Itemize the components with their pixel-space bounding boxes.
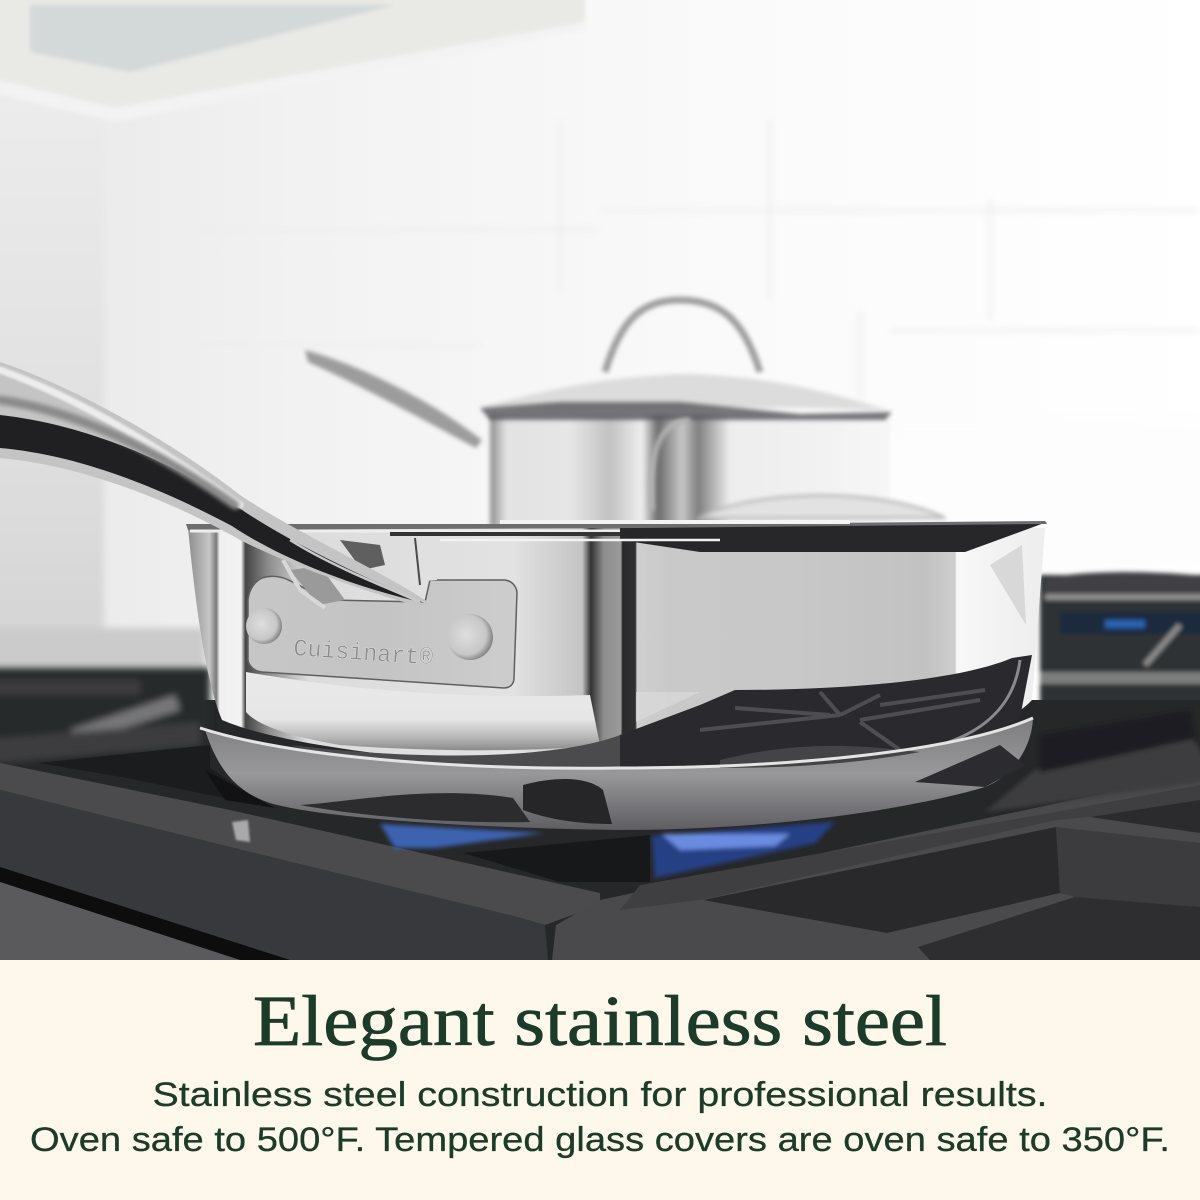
recess one bbox=[703, 827, 1060, 933]
recess near pan bbox=[38, 745, 268, 807]
left rivet bbox=[246, 608, 282, 644]
caption panel bbox=[0, 960, 1200, 1200]
ring top highlight bbox=[200, 718, 1033, 768]
dark strip below body bbox=[290, 735, 620, 768]
glossy highlight on bar bbox=[232, 820, 250, 842]
right rivet bbox=[447, 614, 493, 660]
blurred left grates bbox=[0, 668, 210, 765]
pan rim bbox=[186, 521, 1047, 530]
front-right grate bbox=[552, 773, 1200, 960]
body text line 1: Stainless steel construction for professional results. bbox=[152, 1076, 1048, 1114]
front-left grate bar top face bbox=[0, 763, 600, 925]
logo engraved: Cuisinart® bbox=[292, 636, 435, 673]
photo: cast iron stove grates bbox=[0, 668, 1200, 960]
pan base ring bbox=[205, 718, 1033, 830]
handle bracket bbox=[340, 540, 385, 570]
grate reflection bbox=[620, 655, 1032, 767]
dark rim band right bbox=[620, 522, 1047, 552]
ring reflections bbox=[523, 779, 612, 824]
body text line 2: Oven safe to 500°F. Tempered glass covers are oven safe to 350°F. bbox=[30, 1121, 1170, 1159]
lid rim bbox=[480, 402, 892, 420]
pot body bbox=[490, 415, 890, 527]
photo: kitchen background wall bbox=[0, 0, 1200, 960]
photo: background saucepan with lid bbox=[305, 300, 945, 527]
lid knob handle bbox=[605, 300, 760, 372]
lower bright band bbox=[246, 672, 600, 750]
photo: saute pan bbox=[0, 362, 1047, 830]
black gap and stove body bbox=[0, 867, 290, 960]
recess right wall bbox=[1056, 827, 1200, 907]
glass lid bbox=[480, 374, 888, 410]
top ridge shade bbox=[620, 785, 1200, 910]
pan body bbox=[188, 528, 1045, 768]
photo: range hood shelf bbox=[0, 0, 585, 122]
rear lid loop reflection bbox=[651, 420, 690, 510]
photo: right burner and pot bbox=[1040, 572, 1200, 750]
pot long handle bbox=[305, 350, 482, 448]
heading: Elegant stainless steel bbox=[253, 981, 947, 1061]
photo: blue burner flames bbox=[380, 822, 835, 878]
reflection on right lobe bbox=[990, 545, 1026, 625]
upper-right grate bbox=[985, 735, 1200, 812]
foot shadow bbox=[205, 770, 275, 808]
rear lid behind pan bbox=[700, 495, 945, 518]
bright light column lower bbox=[636, 690, 700, 722]
front-left grate bar front face bbox=[0, 790, 548, 960]
rivet plate bbox=[246, 576, 517, 688]
long steel handle bbox=[0, 362, 428, 606]
recess under pan bbox=[463, 835, 650, 882]
recess two bbox=[918, 897, 1200, 960]
